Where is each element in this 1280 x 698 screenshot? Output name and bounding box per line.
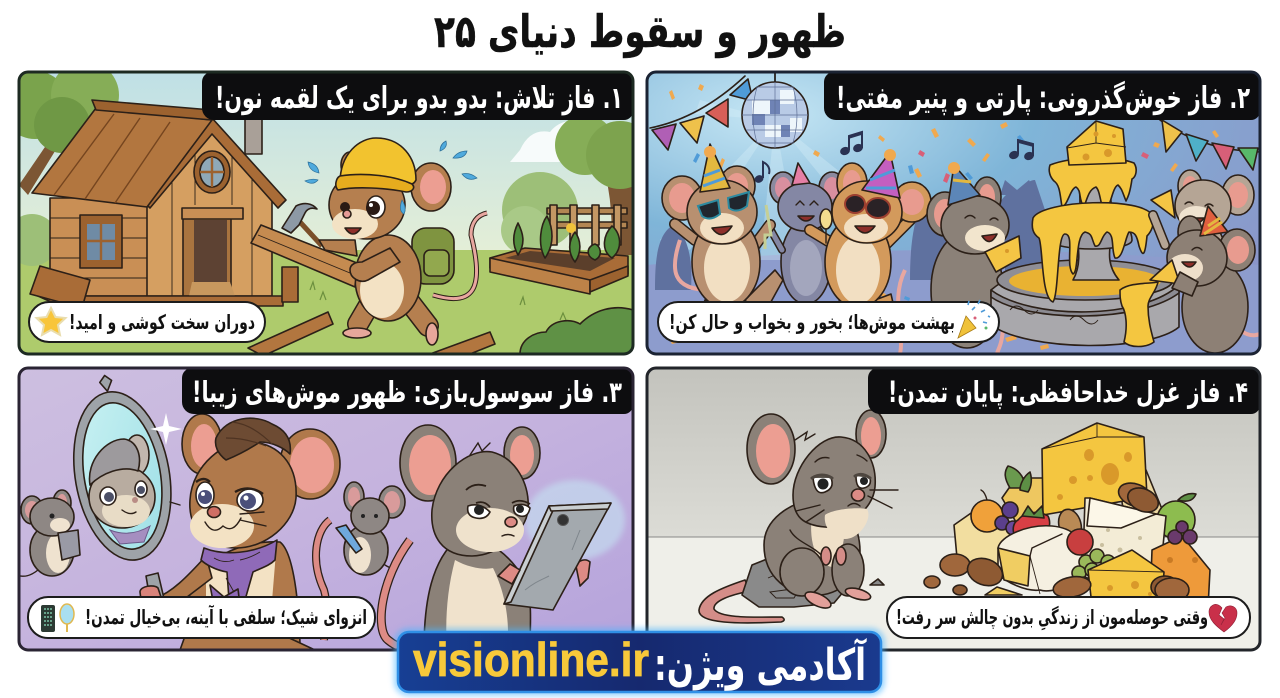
- badge: academy name: آکادمی ویژن:: [654, 637, 867, 691]
- heading 1: ۱. فاز تلاش: بدو بدو برای یک لقمه نون!: [215, 81, 623, 116]
- wooden house: [30, 100, 298, 308]
- badge: website: visionline.ir: [413, 633, 649, 686]
- loose planks: [248, 312, 495, 356]
- small cheese wedge left: [954, 511, 1016, 573]
- garden bed and fence: [490, 205, 628, 294]
- cherry and grapes: [1067, 529, 1115, 591]
- panel 1 frame: [19, 72, 633, 354]
- orange: [971, 490, 1003, 532]
- mirror: [72, 374, 172, 596]
- walnuts: [924, 554, 1189, 602]
- camembert wheel: [998, 526, 1082, 594]
- berries and strawberry: [995, 502, 1050, 542]
- panel 1: struggle phase: [1, 61, 654, 356]
- apple: [1157, 494, 1196, 539]
- panel 4 frame: [647, 368, 1260, 650]
- panel 4: goodbye phase: [647, 368, 1260, 650]
- mouse front right: [1150, 206, 1265, 353]
- icon: party popper: [958, 300, 990, 338]
- icon: hand mirror: [60, 604, 74, 632]
- foreground bush: [520, 308, 633, 354]
- small mouse middle: [336, 482, 405, 575]
- almonds on cheese: [1118, 482, 1159, 513]
- panel 2 frame: [647, 72, 1260, 354]
- callout 3: انزوای شیک؛ سلفی با آینه، بی‌خیال تمدن!: [85, 604, 367, 629]
- callout 4: [887, 597, 1250, 638]
- panel 2: party phase: [647, 72, 1265, 354]
- cheese and fruit pile: [924, 423, 1210, 616]
- heading 2: [824, 72, 1260, 120]
- sparkle: [150, 413, 182, 445]
- heading 3: ۳. فاز سوسول‌بازی: ظهور موش‌های زیبا!: [192, 375, 622, 409]
- vanity mouse body with scarf: [156, 520, 330, 650]
- white cheese block: [1083, 497, 1167, 564]
- worker mouse with helmet, hammer and plank: [251, 138, 487, 345]
- bunting right: [1160, 120, 1260, 170]
- walnut: [1055, 507, 1085, 543]
- disco ball: [742, 72, 808, 148]
- music notes: [754, 132, 1034, 183]
- plum: [1168, 521, 1197, 544]
- brown mouse with sunglasses: [661, 143, 783, 301]
- orange cheese: [1150, 536, 1210, 616]
- callout 2: بهشت موش‌ها؛ بخور و بخواب و حال کن!: [669, 310, 955, 334]
- mouse back right: [1148, 169, 1255, 250]
- callout 2: [658, 300, 999, 342]
- eating gray mouse: [898, 162, 1021, 354]
- crowd silhouettes: [655, 180, 1045, 290]
- mirror reflection: [89, 435, 155, 544]
- gray dancing mouse: [769, 162, 838, 301]
- bunting left: [650, 76, 753, 150]
- right tree: [6, 115, 654, 266]
- yellow wedge front: [1088, 550, 1164, 606]
- footer badge: [394, 628, 885, 696]
- heading 3: [182, 368, 633, 414]
- grass tufts: [310, 282, 566, 320]
- small mouse left: [20, 490, 80, 576]
- panel 3 frame: [19, 368, 633, 650]
- icon: broken heart: [1209, 604, 1237, 632]
- orange mouse with sunglasses: [804, 149, 932, 301]
- heading 4: [868, 368, 1260, 414]
- sweat drops: [305, 141, 477, 214]
- icon: star: [36, 308, 66, 335]
- callout 3: [28, 597, 375, 638]
- heading 1: [202, 72, 633, 120]
- callout 1: [29, 302, 265, 342]
- tail tip and legs behind callout: [180, 639, 314, 648]
- icon: phone: [41, 605, 55, 632]
- confetti: [669, 84, 1219, 350]
- panel 3: vanity phase: [19, 367, 633, 650]
- vanity mouse head: [170, 414, 340, 548]
- gray phone mouse: [381, 425, 611, 650]
- sad mouse on rock: [699, 410, 898, 623]
- cheese fountain: [991, 121, 1179, 346]
- left tree: [20, 74, 119, 195]
- title: ظهور و سقوط دنیای ۲۵: [434, 5, 846, 58]
- callout 1: دوران سخت کوشی و امید!: [69, 310, 255, 334]
